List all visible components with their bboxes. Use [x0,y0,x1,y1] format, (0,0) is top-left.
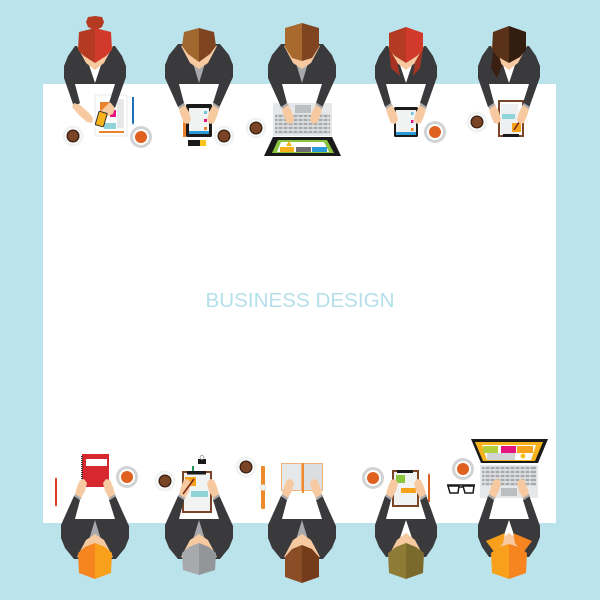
person: top 5 [478,26,540,124]
title: BUSINESS DESIGN [206,289,394,312]
icon: phone [95,111,107,127]
tablet: top 2 [183,104,212,137]
person: bottom 1 [61,479,129,579]
clipboard: bottom 2 [182,471,212,513]
person: top 3 [268,23,336,124]
icon: tea cup [424,121,446,143]
clipboard: bottom 4 [392,470,419,507]
icon: coffee cup [246,118,266,138]
icon: coffee cup [214,126,234,146]
icon: marker [188,140,206,146]
tablet: top 4 [394,107,418,137]
icon: red notebook [82,454,109,487]
clipboard: top 5 [498,100,524,137]
icon: blue pen [132,97,134,125]
icon: tea cup [130,126,152,148]
laptop: top 3 [264,103,341,156]
icon: pencil on clipboard [183,479,194,494]
icon: binder clip [192,456,206,472]
icon: coffee cup [236,456,256,478]
icon: coffee cup [62,126,84,146]
icon: coffee cup [154,470,176,492]
icon: open book [281,463,323,493]
icon: tea cup [452,458,474,480]
person: top 1 with red bun [64,16,126,123]
icon: tea cup [116,466,138,488]
tablet: top 1 [95,95,127,136]
icon: orange pencil [428,473,430,502]
laptop: bottom 5 [471,439,548,498]
icon: glasses [447,485,475,493]
person: bottom 3 [268,479,336,583]
person: top 2 [165,28,233,124]
person: top 4 [375,27,437,124]
icon: tea cup [362,467,384,489]
person: bottom 5 [478,479,540,579]
panel: white table [43,84,556,523]
icon: wristwatch [260,466,266,509]
icon: coffee cup [466,112,488,132]
person: bottom 2 [165,479,233,575]
icon: red pencil [55,477,57,507]
person: bottom 4 [375,479,437,579]
